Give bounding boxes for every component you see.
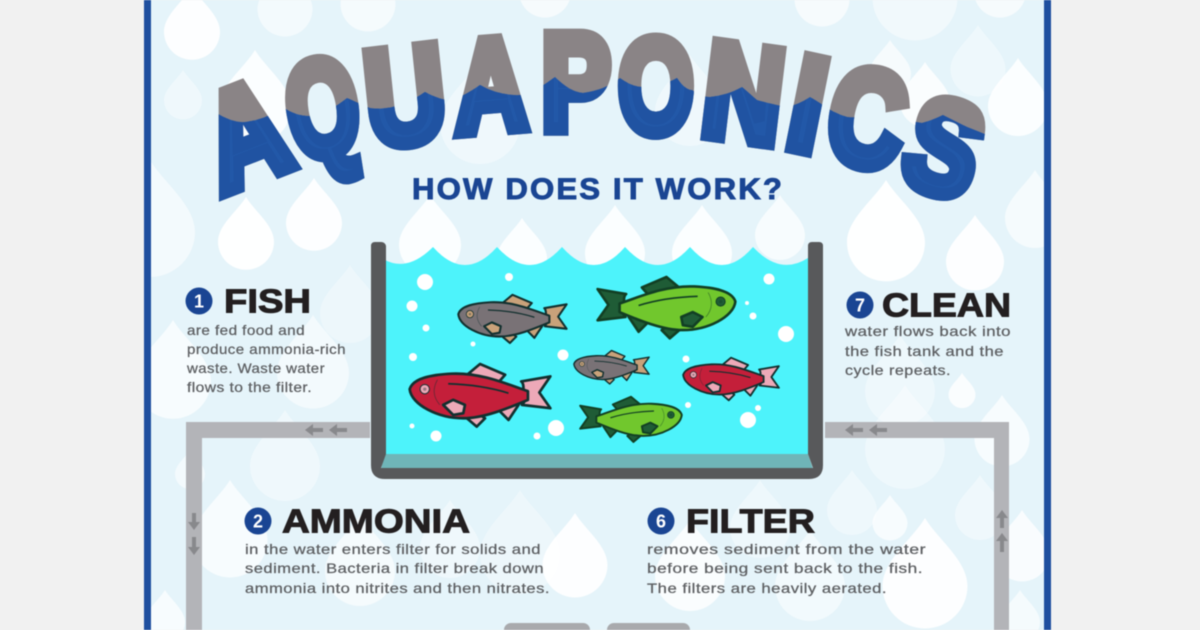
title letters: gray upper layer	[188, 6, 999, 229]
title letters: blue water layer: A	[188, 48, 304, 222]
tank floor	[381, 454, 813, 469]
badge 2	[244, 508, 272, 534]
badge 6: 6	[656, 512, 666, 532]
body text	[186, 322, 346, 395]
title letters: blue water layer: S	[888, 67, 999, 229]
body text: the fish tank and the	[845, 343, 1004, 359]
body text: ammonia into nitrites and then nitrates.	[245, 580, 550, 596]
pipes	[186, 422, 1009, 630]
heading: FISH	[224, 284, 311, 320]
title letters: gray upper layer: P	[542, 6, 610, 158]
tank walls	[371, 242, 823, 479]
step 1: fish	[186, 284, 346, 395]
body text: are fed food and	[187, 322, 305, 338]
title letters: gray upper layer: I	[778, 29, 838, 181]
title letters: gray upper layer: O	[619, 12, 693, 161]
body text	[647, 541, 926, 596]
body text: water flows back into	[844, 323, 1011, 339]
badge 6	[648, 508, 674, 534]
cropped component right	[607, 623, 690, 630]
heading: CLEAN	[882, 288, 1011, 324]
title	[218, 28, 986, 202]
body text: The filters are heavily aerated.	[647, 580, 887, 596]
fish: gray small	[574, 351, 649, 384]
body text: removes sediment from the water	[647, 541, 926, 557]
step 6: filter	[647, 504, 926, 596]
panel border right	[1044, 0, 1051, 630]
badge 2: 2	[253, 512, 263, 532]
title letters: gray upper layer: S	[888, 67, 999, 229]
bubbles	[406, 273, 794, 442]
title letters: gray upper layer: N	[696, 13, 792, 173]
title letters: blue water layer: U	[358, 17, 452, 176]
flow arrows	[188, 424, 1008, 555]
fish: red large	[410, 364, 550, 427]
body text: cycle repeats.	[845, 362, 951, 378]
badge 7	[846, 292, 874, 318]
title letters: gray upper layer: A	[454, 9, 528, 161]
badge 1: 1	[194, 292, 204, 312]
title letters: blue water layer: O	[619, 12, 693, 161]
title letters: blue water layer: C	[817, 37, 918, 200]
background water drops	[105, 0, 1065, 630]
badge 7: 7	[855, 296, 865, 316]
fish: green large	[598, 277, 735, 338]
fish: red small	[683, 358, 779, 400]
body text: produce ammonia-rich	[187, 341, 346, 357]
fish: green small	[580, 397, 682, 442]
panel: page background	[148, 0, 1048, 630]
heading: AMMONIA	[282, 504, 470, 540]
title letters: blue water layer: A	[454, 9, 528, 161]
body text: in the water enters filter for solids and	[245, 541, 541, 557]
subtitle: HOW DOES IT WORK?	[412, 173, 784, 206]
title letters: blue water layer: Q	[275, 29, 370, 189]
body text: sediment. Bacteria in filter break down	[245, 560, 544, 576]
title letters: blue water layer	[218, 76, 986, 202]
body text	[245, 541, 550, 596]
title letters: gray upper layer: U	[358, 17, 452, 176]
title letters: blue water layer: P	[542, 6, 610, 158]
fish: gray large	[458, 295, 567, 343]
step 2: ammonia	[244, 504, 550, 596]
fish tank	[371, 242, 823, 479]
cropped component left	[504, 623, 590, 630]
title letters: gray upper layer: Q	[275, 29, 370, 189]
body text: flows to the filter.	[187, 379, 312, 395]
body text: waste. Waste water	[186, 360, 325, 376]
panel border left	[144, 0, 151, 630]
heading: FILTER	[686, 504, 815, 540]
body text: before being sent back to the fish.	[647, 560, 923, 576]
step 7: clean	[844, 288, 1011, 378]
water	[385, 247, 808, 455]
title letters: blue water layer: I	[778, 29, 838, 181]
infographic	[143, 0, 1052, 630]
body text	[844, 323, 1011, 378]
title letters: blue water layer: N	[696, 13, 792, 173]
title letters: gray upper layer: A	[188, 48, 304, 222]
title letters: gray upper layer: C	[817, 37, 918, 200]
badge 1	[186, 288, 212, 314]
